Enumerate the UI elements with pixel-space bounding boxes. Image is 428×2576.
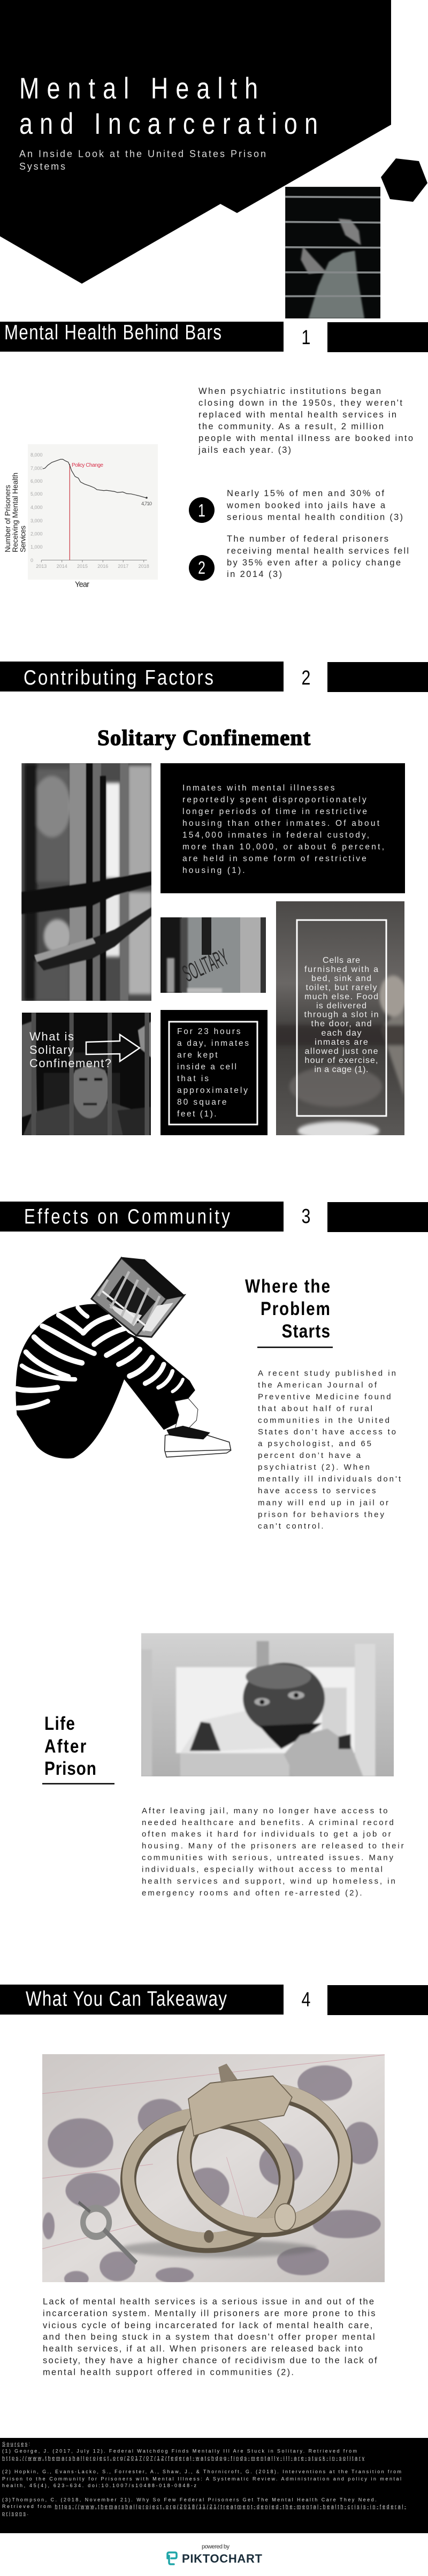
text block: recent study: that about half of rural [258, 1404, 372, 1413]
text block: psychiatric institutions: jails each year. (3) [198, 445, 291, 455]
numbered fact 2: receiving mental health services fell [227, 546, 409, 556]
section header 1: Mental Health Behind Bars [4, 321, 221, 344]
text block: after leaving jail: individuals, especially without access to mental [142, 1865, 383, 1874]
photo: blurred prison bars [21, 763, 151, 1001]
x axis [36, 560, 149, 569]
text block: recent study: percent don’t have a [258, 1451, 361, 1460]
text block: recent study: States don’t have access to [258, 1427, 396, 1437]
sources panel: https://www.themarshallproject.org/2017/07/12/federal-watchdog-finds-mentally-ill-are-stuck-in-solitary [2, 2456, 365, 2461]
text block: psychiatric institutions: replaced with mental health services in [198, 410, 396, 420]
arrow [86, 1035, 140, 1061]
y axis ticks: 3,000 [30, 518, 43, 523]
section header 4: 4 [302, 1988, 310, 2011]
cell description: furnished with a [304, 965, 378, 974]
x axis: 2014 [57, 564, 67, 569]
cell description [304, 956, 379, 1074]
callout: restrictive housing: reportedly spent disproportionately [182, 795, 366, 804]
text block: psychiatric institutions [198, 386, 413, 455]
x axis: 2018 [139, 564, 149, 569]
numbered fact 1: 1 [198, 501, 205, 521]
question text [29, 1032, 111, 1067]
x axis: 2015 [77, 564, 88, 569]
text block: recent study: mentally ill individuals don't [258, 1475, 401, 1484]
text block: after leaving jail: often makes it hard for individuals to get a job or [142, 1829, 391, 1839]
cell description: inmates are [315, 1038, 368, 1047]
hero panel: black polygon with title [0, 0, 391, 284]
y axis ticks: 4,000 [30, 505, 43, 510]
photo with text: what is solitary confinement [22, 1013, 151, 1135]
callout: 23 hours a day: approximately [177, 1086, 248, 1095]
cell description: allowed just one [305, 1047, 378, 1056]
sources panel: Retrieved from [2, 2504, 51, 2509]
text block: psychiatric institutions: When psychiatric institutions began [198, 386, 381, 396]
cell description: toilet, but rarely [306, 983, 377, 992]
heading: life after prison: Prison [44, 1758, 96, 1779]
callout: 23 hours a day: feet (1). [177, 1110, 217, 1119]
y axis title: Number of Prisoners [3, 485, 12, 552]
text block: psychiatric institutions: closing down in the 1950s, they weren't [198, 398, 402, 408]
numbered fact 1: serious mental health condition (3) [227, 513, 403, 522]
section header 3: Effects on Community [24, 1205, 230, 1228]
callout: restrictive housing [160, 763, 405, 893]
text block: conclusion: health services, if at all. When prisoners are released back into [43, 2344, 363, 2354]
sources panel: https://www.themarshallproject.org/2018/11/21/treatment-denied-the-mental-health-crisis-in-federal- [55, 2504, 406, 2509]
text block: conclusion: vicious cycle of being incarcerated for lack of mental health care, [43, 2321, 372, 2330]
callout: restrictive housing: are held in some form of restrictive [182, 854, 366, 863]
section header 3 [0, 1202, 428, 1232]
numbered fact 2 [189, 534, 409, 581]
callout: 23 hours a day: are kept [177, 1051, 218, 1060]
illustration: striped prisoner with caged head [16, 1257, 231, 1458]
cell description: through a slot in [304, 1010, 379, 1019]
section header 2 [0, 662, 428, 692]
numbered fact 2: 2 [198, 559, 205, 578]
cell description: each day [321, 1029, 362, 1038]
text block: recent study: many will end up in jail or [258, 1499, 388, 1507]
callout: restrictive housing: housing (1). [182, 866, 245, 875]
callout: restrictive housing: 154,000 inmates in federal custody, [182, 831, 369, 840]
heading: where the problem starts [245, 1276, 333, 1348]
photo: handcuffs and key on fingerprint card [42, 2054, 385, 2286]
line chart: prisoners receiving mental health services: 4,710 [141, 501, 152, 507]
section header 4: What You Can Takeaway [26, 1987, 227, 2010]
y axis ticks: 7,000 [30, 466, 43, 471]
cell description: in a cage (1). [315, 1065, 368, 1074]
heading: life after prison [42, 1713, 114, 1784]
callout: 23 hours a day: 80 square [177, 1098, 227, 1107]
photo: solitary sign [160, 917, 266, 993]
text block: psychiatric institutions: people with mental illness are booked into [198, 434, 413, 443]
question text: Confinement? [29, 1057, 111, 1070]
section header 2: 2 [302, 667, 310, 689]
heading: solitary confinement: Solitary Confinement [97, 725, 310, 750]
callout: restrictive housing: more than 10,000, or about 6 percent, [182, 842, 384, 852]
policy change marker: Policy Change [72, 462, 103, 468]
callout: 23 hours a day: that is [177, 1074, 209, 1083]
text block: after leaving jail [142, 1806, 404, 1898]
photo: man looking through cell door slot [141, 1633, 394, 1776]
cell description: the door, and [311, 1019, 371, 1029]
photo: hands reaching through bars [285, 187, 380, 318]
section header 3: 3 [302, 1205, 310, 1228]
text block: recent study: A recent study published in [258, 1369, 396, 1378]
cell description: Cells are [323, 956, 360, 965]
subtitle: An Inside Look at the United States Prison [19, 149, 266, 159]
cell description: hour of exercise, [305, 1056, 378, 1065]
y axis ticks: 2,000 [30, 531, 43, 536]
data line [43, 459, 147, 498]
y axis title: Receiving Mental Health [11, 473, 19, 552]
y axis ticks: 6,000 [30, 478, 43, 484]
heading: where the problem starts: Starts [281, 1321, 330, 1342]
heading: life after prison: After [44, 1736, 87, 1757]
text block: after leaving jail: After leaving jail, many no longer have access to [142, 1806, 387, 1815]
x axis: 2017 [118, 564, 128, 569]
icon: piktochart logo [167, 2552, 177, 2564]
callout: restrictive housing: housing than other inmates. Of about [182, 819, 380, 828]
numbered fact 2: The number of federal prisoners [227, 534, 388, 544]
sources panel: prisons . [2, 2511, 28, 2516]
numbered fact 1: women booked into jails have a [226, 501, 386, 511]
text block: conclusion: incarceration system. Mentally ill prisoners are more prone to this [43, 2309, 375, 2319]
line chart: prisoners receiving mental health services [3, 444, 158, 589]
text block: after leaving jail: communities with serious, untreated issues. Many [142, 1853, 393, 1863]
text block: conclusion: mental health support offered in communities (2). [43, 2368, 294, 2377]
sources panel: (2) Hopkin, G., Evans-Lacko, S., Forrester, A., Shaw, J., & Thornicroft, G. (2018). Interventions at the Transition from [2, 2469, 401, 2474]
text block: recent study: the American Journal of [258, 1381, 377, 1389]
cell description: is delivered [316, 1001, 366, 1010]
text block: after leaving jail: emergency rooms and often re-arrested (2). [142, 1888, 362, 1898]
text block: after leaving jail: housing. Many of the prisoners are released to their [142, 1841, 404, 1851]
title: and Incarceration [19, 107, 318, 140]
x axis title: Year [75, 581, 89, 589]
heading: where the problem starts: Problem [261, 1298, 330, 1319]
question text: What is [29, 1030, 74, 1043]
text block: recent study: psychiatrist (2). When [258, 1463, 370, 1472]
y axis ticks: 5,000 [30, 491, 43, 497]
photo with text: cell and inner frame [276, 901, 407, 1141]
sources panel: (1) George, J. (2017, July 12). Federal Watchdog Finds Mentally Ill Are Stuck in Solitary. Retrieved from [2, 2448, 357, 2453]
y axis ticks: 8,000 [30, 452, 43, 458]
numbered fact 2: in 2014 (3) [227, 569, 282, 579]
text block: recent study [258, 1369, 401, 1531]
y axis ticks: 0 [30, 558, 33, 563]
sources panel: Sources : [2, 2441, 30, 2446]
numbered fact 1: Nearly 15% of men and 30% of [227, 489, 384, 498]
sources panel [0, 2438, 428, 2533]
text block: after leaving jail: health services and support, wind up homeless, in [142, 1876, 395, 1886]
text block: conclusion: Lack of mental health services is a serious issue in and out of the [43, 2297, 374, 2307]
text block: psychiatric institutions: the community. As a result, 2 million [198, 422, 384, 431]
title: Mental Health [19, 71, 258, 105]
text block: recent study: Preventive Medicine found [258, 1393, 391, 1401]
section header 1 [0, 321, 428, 352]
sources panel: (3)Thompson, C. (2018, November 21). Why So Few Federal Prisoners Get The Mental Health Care They Need. [2, 2497, 377, 2503]
heading: where the problem starts: Where the [245, 1276, 330, 1297]
cell description: bed, sink and [311, 974, 371, 983]
inner frame [297, 920, 386, 1116]
cuff rings [128, 2090, 345, 2243]
callout: 23 hours a day: inside a cell [177, 1062, 236, 1072]
text block: recent study: communities in the United [258, 1416, 389, 1425]
subtitle: Systems [19, 161, 65, 172]
sources panel: Prison to the Community for Prisoners with Mental Illness: A Systematic Review. Administration and policy in mental [2, 2476, 401, 2481]
section header 4 [0, 1985, 428, 2015]
question text: Solitary [29, 1043, 74, 1057]
text block: recent study: a psychologist, and 65 [258, 1439, 371, 1448]
numbered fact 1 [189, 489, 403, 523]
key [79, 2202, 136, 2263]
x axis: 2013 [36, 564, 47, 569]
callout: 23 hours a day: a day, inmates [177, 1039, 249, 1048]
photo: solitary sign: SOLITARY [179, 945, 232, 987]
text block: conclusion [43, 2297, 377, 2377]
subtitle [19, 149, 266, 172]
y axis title: Services [18, 526, 27, 552]
y axis title [3, 473, 27, 552]
title [19, 71, 318, 140]
icon: black hexagon [381, 158, 427, 202]
callout: restrictive housing: Inmates with mental illnesses [182, 784, 335, 793]
sources panel: health, 45(4), 623–634. doi:10.1007/s10488-018-0848-z [2, 2483, 196, 2488]
callout: 23 hours a day [160, 1010, 268, 1135]
y axis ticks [30, 452, 43, 563]
hand and ankle [175, 1399, 198, 1430]
numbered fact 2: by 35% even after a policy change [227, 558, 401, 567]
footer: powered by Piktochart: powered by [202, 2543, 230, 2550]
cage [91, 1257, 184, 1337]
text block: recent study: can't control. [258, 1522, 324, 1531]
footer: powered by Piktochart: PIKTOCHART [182, 2552, 263, 2565]
text block: after leaving jail: needed healthcare and benefits. A criminal record [142, 1818, 394, 1827]
text block: recent study: prison for behaviors they [258, 1510, 384, 1519]
heading: life after prison: Life [44, 1713, 75, 1734]
text block: conclusion: and then being stuck in a system that doesn't offer proper mental [43, 2332, 374, 2342]
y axis ticks: 1,000 [30, 544, 43, 550]
section header 2: Contributing Factors [24, 665, 213, 689]
callout: restrictive housing: longer periods of time in restrictive [182, 807, 367, 816]
shoe [165, 1426, 231, 1457]
footer: powered by Piktochart [167, 2543, 263, 2565]
text block: conclusion: society, they have a higher chance of recidivism due to the lack of [43, 2356, 377, 2366]
cell description: much else. Food [304, 992, 378, 1001]
x axis: 2016 [97, 564, 108, 569]
callout: 23 hours a day: For 23 hours [177, 1027, 241, 1036]
section header 1: 1 [302, 326, 310, 349]
text block: recent study: have access to services [258, 1486, 376, 1495]
